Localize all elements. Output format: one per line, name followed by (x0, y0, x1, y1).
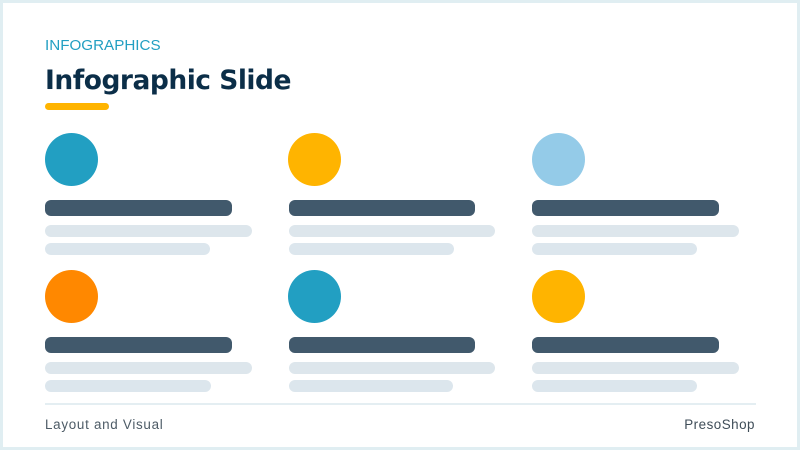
footer right text: PresoShop (684, 417, 755, 432)
icon: yellow circle (288, 133, 341, 186)
title: Infographic Slide (45, 65, 291, 96)
item 4 second text line (45, 380, 211, 392)
item 3 second text line (532, 243, 697, 255)
icon: light blue circle (532, 133, 585, 186)
item 3 heading bar (532, 200, 719, 216)
item 5 first text line (289, 362, 495, 374)
panel: item 6 (532, 270, 739, 392)
item 6 second text line (532, 380, 697, 392)
item 5 heading bar (289, 337, 475, 353)
icon: blue circle (45, 133, 98, 186)
eyebrow heading: INFOGRAPHICS (45, 37, 161, 54)
panel: item 2 (288, 133, 495, 255)
item 4 first text line (45, 362, 252, 374)
item 2 second text line (289, 243, 454, 255)
item 2 first text line (289, 225, 495, 237)
panel: item 3 (532, 133, 739, 255)
footer left text: Layout and Visual (45, 417, 163, 432)
item 1 second text line (45, 243, 210, 255)
icon: orange circle (45, 270, 98, 323)
item 1 heading bar (45, 200, 232, 216)
icon: blue circle (288, 270, 341, 323)
item 3 first text line (532, 225, 739, 237)
item 6 first text line (532, 362, 739, 374)
item 6 heading bar (532, 337, 719, 353)
panel: item 4 (45, 270, 252, 392)
item 5 second text line (289, 380, 453, 392)
icon: yellow circle (532, 270, 585, 323)
panel: item 1 (45, 133, 252, 255)
item 4 heading bar (45, 337, 232, 353)
item 1 first text line (45, 225, 252, 237)
item 2 heading bar (289, 200, 475, 216)
panel: item 5 (288, 270, 495, 392)
title underline accent (45, 103, 109, 110)
